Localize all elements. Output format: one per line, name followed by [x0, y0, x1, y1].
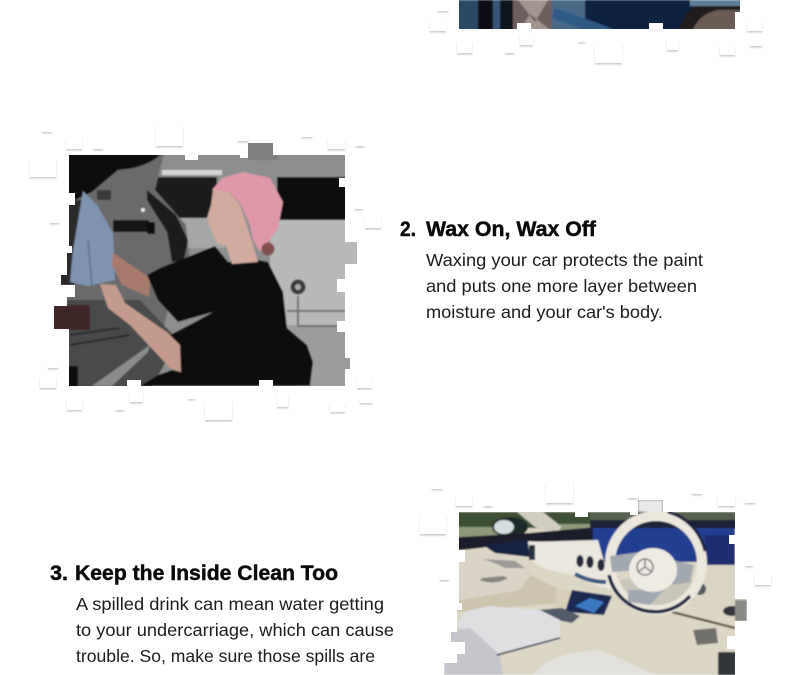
step 3 text block [50, 562, 394, 666]
steering wheel lower fill [620, 578, 695, 605]
arm upper [112, 253, 150, 297]
car hood [61, 155, 190, 326]
step 2 body: and puts one more layer between [426, 276, 697, 296]
instrument screen [593, 528, 735, 562]
dashboard [528, 540, 612, 590]
dash dark band [459, 526, 594, 551]
arm lower [100, 284, 181, 372]
top tab [638, 500, 663, 512]
step 3 heading: 3. [50, 562, 68, 585]
step 2 text block [400, 218, 703, 322]
dashboard right [695, 565, 747, 620]
step 3 heading: Keep the Inside Clean Too [75, 562, 338, 585]
logo [637, 559, 653, 575]
bun [262, 242, 274, 256]
photo 2: woman with pink hair waxing a car [30, 125, 381, 420]
seat bottom [533, 650, 657, 675]
seat left [444, 628, 503, 675]
body [140, 246, 313, 386]
hub [629, 548, 677, 592]
hair [212, 172, 283, 252]
step 2 body: Waxing your car protects the paint [426, 250, 703, 270]
door panel [444, 552, 530, 603]
rag [70, 191, 115, 286]
armrest [455, 606, 560, 655]
centre console [556, 588, 571, 608]
step 3 body [76, 594, 394, 666]
step 3 body: A spilled drink can mean water getting [76, 594, 384, 614]
pedals [693, 628, 718, 645]
photo 1: car wheels on dark blue body, cropped at top [430, 0, 762, 63]
step 2 body: moisture and your car's body. [426, 302, 663, 322]
window view [444, 512, 594, 528]
mirror [492, 517, 528, 537]
step 2 heading: 2. [400, 218, 416, 241]
step 3 body: to your undercarriage, which can cause [76, 620, 394, 640]
car door lower [67, 300, 172, 386]
photo 3: Mercedes interior with cream leather [420, 482, 771, 675]
pipe [290, 280, 306, 294]
step 2 body [426, 250, 703, 322]
neck and face [207, 190, 258, 264]
spokes [610, 552, 694, 605]
steering wheel [610, 516, 702, 610]
step 2 heading: Wax On, Wax Off [426, 218, 597, 241]
step 3 body: trouble. So, make sure those spills are [76, 646, 375, 666]
